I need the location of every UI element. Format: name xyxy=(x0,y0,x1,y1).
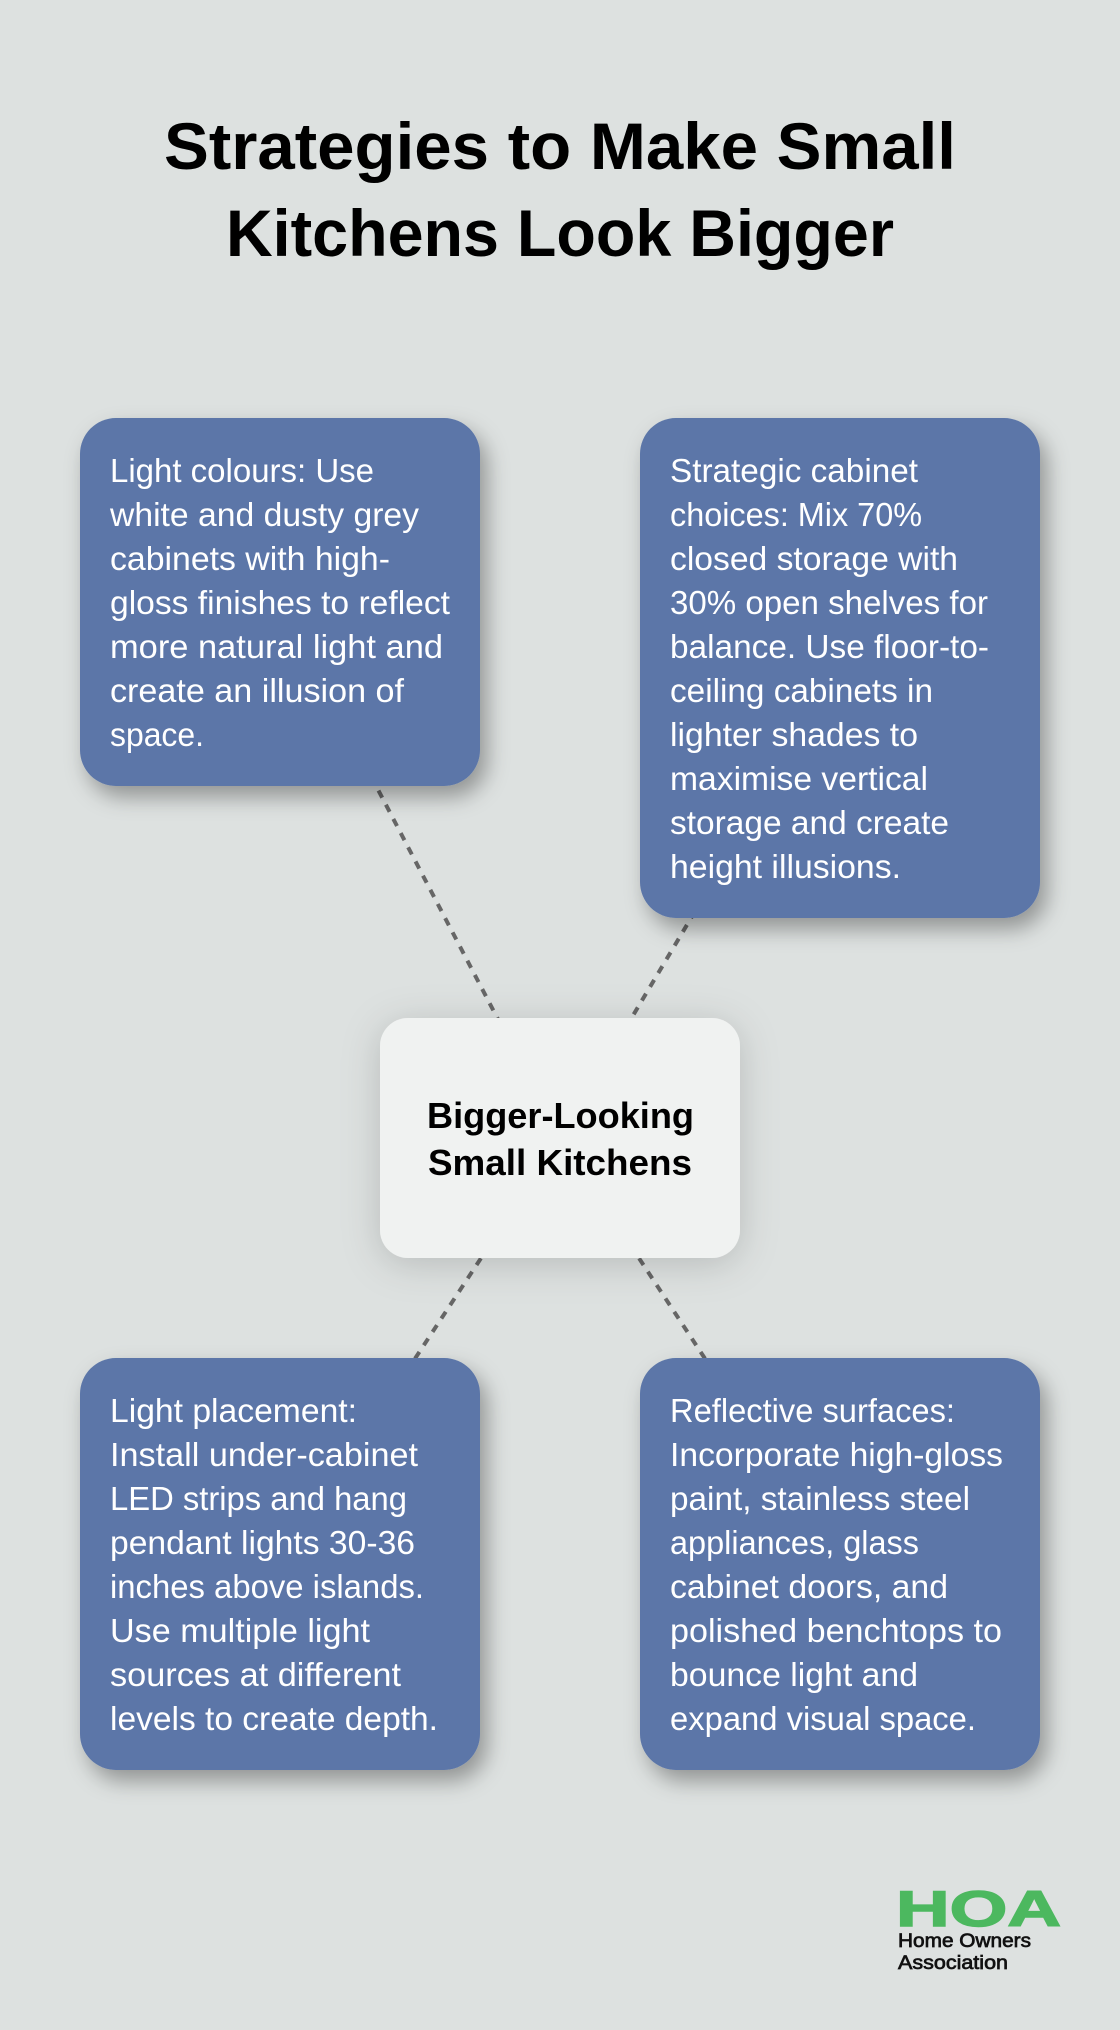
dotted connectors from centre to the four panels xyxy=(280,602,840,1564)
panel text xyxy=(110,1392,438,1737)
logo wordmark: Home Owners xyxy=(898,1931,1031,1952)
centre label xyxy=(427,1095,694,1183)
panel text: gloss finishes to reflect xyxy=(110,584,450,621)
panel text: lighter shades to xyxy=(670,716,918,753)
panel text: bounce light and xyxy=(670,1656,918,1693)
logo: HOA Home Owners Association xyxy=(896,1881,1061,1974)
panel text: 30% open shelves for xyxy=(670,584,988,621)
panel: reflective surfaces xyxy=(640,1358,1040,1770)
panel text: Use multiple light xyxy=(110,1612,370,1649)
centre label: Small Kitchens xyxy=(428,1142,692,1183)
panel text: polished benchtops to xyxy=(670,1612,1002,1649)
panel text: Light colours: Use xyxy=(110,452,374,489)
panel text: Strategic cabinet xyxy=(670,452,918,489)
panel text: pendant lights 30-36 xyxy=(110,1524,415,1561)
panel text: ceiling cabinets in xyxy=(670,672,933,709)
panel text: balance. Use floor-to- xyxy=(670,628,989,665)
title: Kitchens Look Bigger xyxy=(226,196,894,270)
title: Strategies to Make Small xyxy=(164,109,956,183)
panel text: height illusions. xyxy=(670,848,901,885)
logo wordmark xyxy=(898,1931,1031,1974)
panel text: cabinet doors, and xyxy=(670,1568,948,1605)
panel: strategic cabinet choices xyxy=(640,418,1040,918)
logo wordmark: Association xyxy=(898,1953,1008,1974)
panel text: Incorporate high-gloss xyxy=(670,1436,1003,1473)
panel background xyxy=(80,418,480,786)
logo mark: HOA xyxy=(896,1881,1061,1937)
panel text: Reflective surfaces: xyxy=(670,1392,955,1429)
centre node: bigger-looking small kitchens xyxy=(380,1018,740,1258)
panel text: create an illusion of xyxy=(110,672,405,709)
panel: light placement xyxy=(80,1358,480,1770)
panel background xyxy=(640,418,1040,918)
panel text xyxy=(109,452,450,753)
panel text: maximise vertical xyxy=(670,760,928,797)
panel text: inches above islands. xyxy=(110,1568,424,1605)
panel text: cabinets with high- xyxy=(110,540,390,577)
centre background xyxy=(380,1018,740,1258)
panel text: more natural light and xyxy=(110,628,443,665)
panel text xyxy=(670,452,989,885)
panel background xyxy=(80,1358,480,1770)
panel text: LED strips and hang xyxy=(110,1480,407,1517)
panel background xyxy=(640,1358,1040,1770)
panel text: white and dusty grey xyxy=(109,496,420,533)
panel text: appliances, glass xyxy=(670,1524,919,1561)
panel text: sources at different xyxy=(110,1656,401,1693)
panel text: closed storage with xyxy=(670,540,958,577)
title xyxy=(164,109,956,270)
panel text: Install under-cabinet xyxy=(110,1436,418,1473)
panel text: Light placement: xyxy=(110,1392,357,1429)
panel: light colours xyxy=(80,418,480,786)
centre label: Bigger-Looking xyxy=(427,1095,694,1136)
panel text xyxy=(670,1392,1003,1737)
panel text: space. xyxy=(110,716,204,753)
panel text: storage and create xyxy=(670,804,949,841)
panel text: choices: Mix 70% xyxy=(670,496,922,533)
panel text: paint, stainless steel xyxy=(670,1480,970,1517)
panel text: levels to create depth. xyxy=(110,1700,438,1737)
panel text: expand visual space. xyxy=(670,1700,976,1737)
